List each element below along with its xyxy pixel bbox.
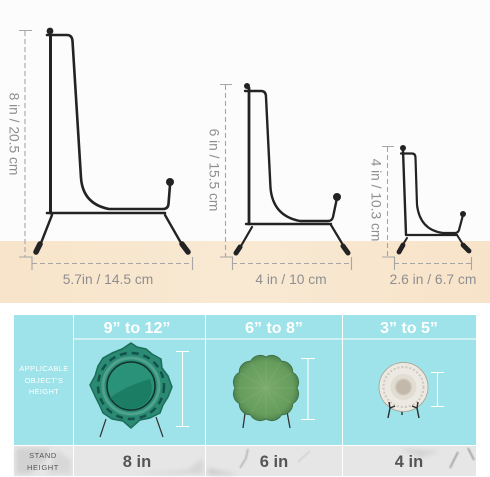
column header: 6 to 8: 6” to 8”	[245, 320, 303, 337]
height marker: small plate	[431, 372, 444, 406]
dimension: 4 in height: 4 in / 10.3 cm	[368, 159, 384, 241]
row label: applicable object's height: OBJECT'S	[25, 376, 63, 385]
column header: 9 to 12: 9” to 12”	[104, 320, 170, 337]
height marker: medium plate	[301, 358, 315, 420]
small 4 in stand	[399, 145, 469, 252]
teal ornate plate on stand	[90, 343, 172, 437]
dimension: 6 in height: 6 in / 15.5 cm	[206, 129, 222, 211]
row label: applicable object's height: HEIGHT	[29, 387, 59, 396]
dimension: 6 in height	[206, 84, 232, 270]
column header: 3 to 5: 3” to 5”	[380, 320, 438, 337]
dimension: 2.6 in width	[390, 257, 476, 287]
stand height value: 8 in: 8 in	[123, 453, 151, 471]
dimension: 8 in height: 8 in / 20.5 cm	[6, 93, 22, 175]
green lotus plate on stand	[233, 355, 299, 428]
dimension: 8 in height	[6, 30, 32, 270]
row label: stand height: HEIGHT	[27, 463, 59, 472]
wall background	[0, 0, 490, 241]
dimension: 2.6 in width: 2.6 in / 6.7 cm	[390, 272, 476, 287]
white patterned plate on stand	[379, 362, 428, 418]
stand height value: 4 in: 4 in	[395, 453, 423, 471]
size comparison table	[14, 315, 476, 476]
large 8 in stand	[36, 28, 188, 252]
stand height value: 6 in: 6 in	[260, 453, 288, 471]
marble row background	[14, 446, 476, 476]
wooden surface	[0, 241, 490, 303]
dimension: 4 in height	[368, 146, 394, 270]
table grid lines	[14, 315, 476, 476]
medium 6 in stand	[236, 83, 348, 253]
dimension: 4 in width: 4 in / 10 cm	[255, 272, 327, 287]
height marker: large plate	[176, 352, 189, 426]
row label: applicable object's height: APPLICABLE	[19, 364, 69, 373]
dimension: 5.7 in width: 5.7in / 14.5 cm	[63, 272, 153, 287]
table teal panel	[14, 315, 476, 445]
row label: stand height: STAND	[29, 451, 57, 460]
dimension: 4 in width	[232, 257, 352, 287]
